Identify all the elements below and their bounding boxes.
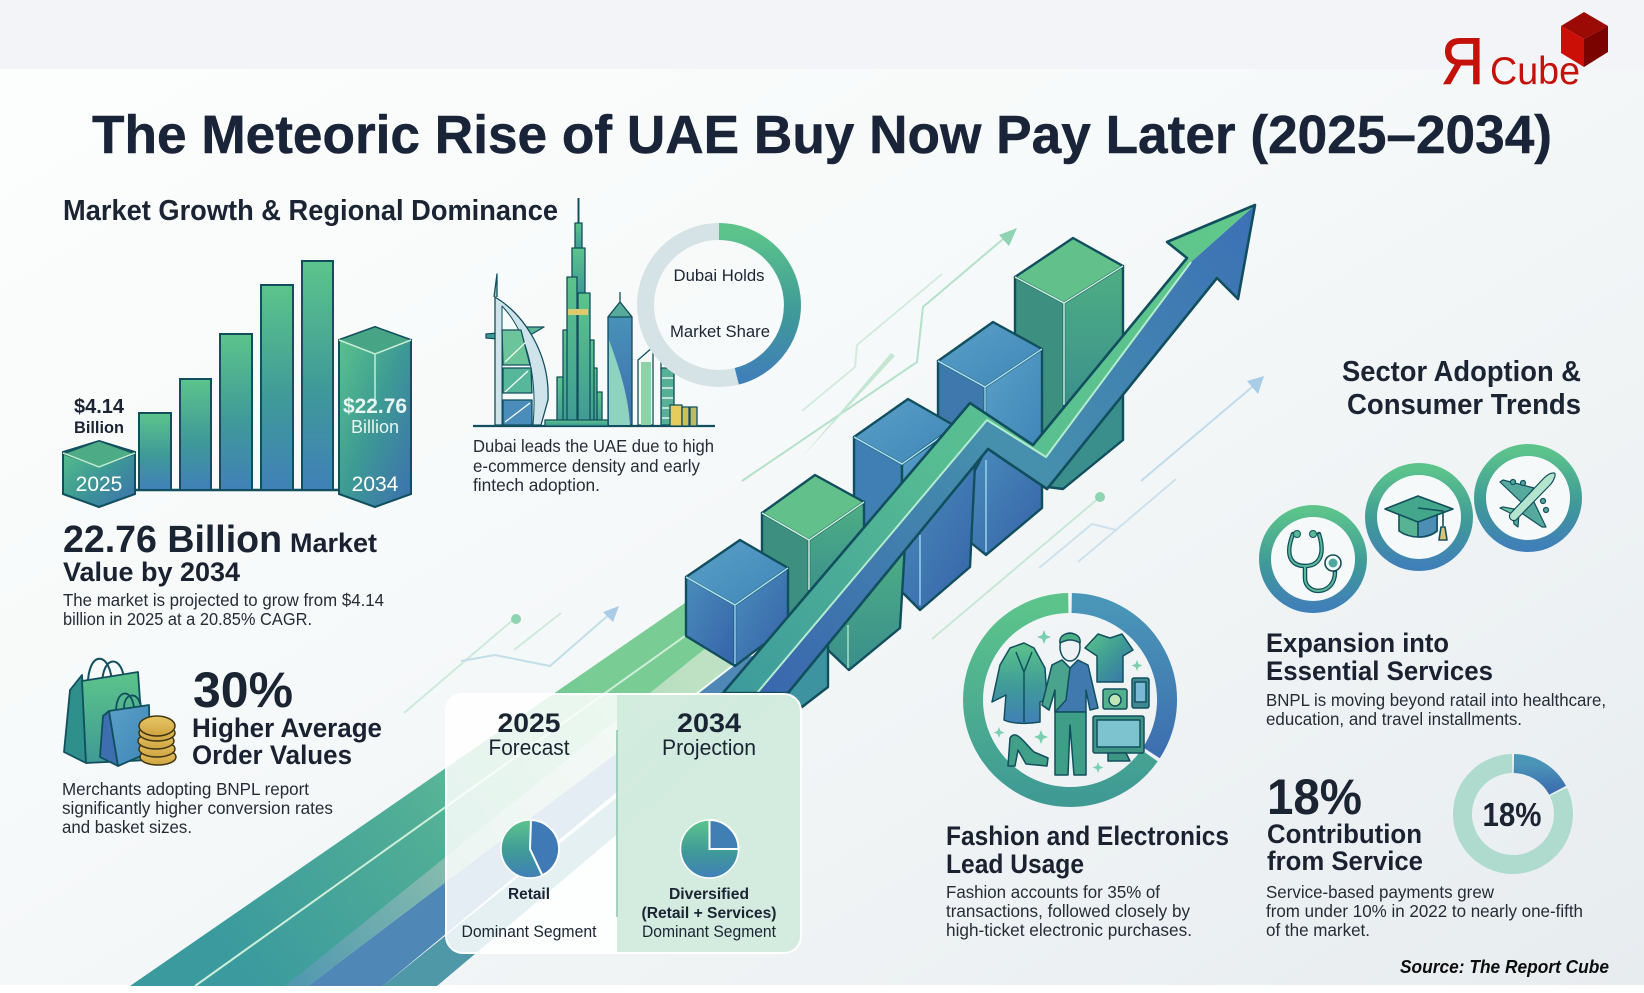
donut: 18% share [1462,764,1563,864]
column 4 blue [854,399,975,610]
2025 forecast column [462,708,597,941]
source note: Source: The Report Cube [1400,957,1609,977]
cube: 2034 [339,327,411,507]
stat: 30% higher AOV: Higher Average [192,713,382,743]
logo: RCube: Я [1441,24,1484,98]
stat: 18% contribution [1266,769,1583,940]
stat: 18% contribution: from Service [1267,846,1423,876]
stat: 22.76 Billion: 22.76 Billion [63,519,282,561]
2025 forecast column: Forecast [488,735,570,760]
2034 projection column: 2034 [677,708,741,738]
stat: 30% higher AOV: significantly higher conversion rates [62,798,333,818]
stat: 22.76 Billion: Market [290,528,377,558]
heading: Market Growth: Market Growth & Regional Dominance [63,195,558,227]
text: Dubai description: fintech adoption. [473,475,600,495]
2034 projection column: Projection [662,735,756,760]
stat: 18% contribution: 18% [1267,769,1362,825]
text: Dubai description [473,436,714,495]
label: $4.14 Billion [74,396,125,437]
text: Fashion and Electronics [946,821,1229,940]
text: Fashion and Electronics: Fashion and Electronics [946,821,1229,851]
stat: 18% contribution: Contribution [1267,819,1422,849]
donut: fashion and electronics [973,603,1167,797]
text: Expansion into Essential Services: Essential Services [1266,656,1493,686]
icon: clothing and electronics [992,630,1149,775]
text: Expansion into Essential Services: BNPL is moving beyond ratail into healthcare, [1266,690,1606,710]
label: $4.14 Billion: $4.14 [74,396,125,418]
icon: shopping bags and coins [64,659,176,766]
illustration: Dubai skyline [473,198,715,426]
stat: 22.76 Billion: Value by 2034 [63,557,240,587]
arrow: main growth arrow [723,205,1255,693]
stat: 30% higher AOV: Order Values [192,740,352,770]
donut: Dubai market share: Dubai Holds [674,266,764,285]
stat: 18% contribution: Service-based payments grew [1266,882,1494,902]
chart: isometric growth columns [686,238,1123,707]
stat: 22.76 Billion: The market is projected to grow from $4.14 [63,590,384,610]
2025 forecast column: Dominant Segment [462,922,597,941]
stat: 18% contribution: of the market. [1266,920,1370,940]
cube: 2034: $22.76 [343,395,407,418]
text: Dubai description: e-commerce density and early [473,456,700,476]
donut: Dubai market share [646,232,792,378]
heading: Sector Adoption: Sector Adoption & [1342,356,1581,388]
logo: RCube: Cube [1490,50,1580,93]
cube: 2025 [63,441,135,507]
text: Expansion into Essential Services: education, and travel installments. [1266,709,1522,729]
title: The Meteoric Rise of UAE Buy Now Pay Later (2025–2034) [92,105,1552,165]
heading: Sector Adoption [1342,356,1581,421]
text: Fashion and Electronics: high-ticket electronic purchases. [946,920,1192,940]
stat: 22.76 Billion [63,519,384,629]
2034 projection column: Diversified [669,886,749,903]
cube: 2025: 2025 [76,473,122,496]
towers [608,292,697,426]
text: Dubai description: Dubai leads the UAE due to high [473,436,714,456]
2034 projection column [642,708,776,941]
stat: 22.76 Billion: billion in 2025 at a 20.85% CAGR. [63,609,312,629]
icon: graduation cap [1371,469,1467,565]
panel: forecast comparison card [446,694,801,953]
Burj Al Arab [486,274,548,425]
donut: Dubai market share: Market Share [670,322,770,341]
Burj Khalifa [545,198,613,426]
stat: 30% higher AOV: Merchants adopting BNPL report [62,779,309,799]
cube 1 blue [686,540,788,666]
stat: 30% higher AOV: 30% [193,662,293,718]
text: Fashion and Electronics: Fashion accounts for 35% of [946,882,1160,902]
donut: 18% share: 18% [1482,796,1542,833]
column 6 green [1015,238,1123,489]
column 3 green [762,475,905,670]
text: Fashion and Electronics: transactions, followed closely by [946,901,1190,921]
2034 projection column: (Retail + Services) [642,905,776,922]
cube: 2034: 2034 [352,473,399,496]
2034 projection column: Dominant Segment [642,922,776,941]
logo: RCube [1441,12,1608,98]
faded trend trails [404,228,1264,713]
label: $4.14 Billion: Billion [74,418,124,437]
bar chart: market growth [63,261,411,507]
background swoosh [130,565,800,986]
text: Expansion into Essential Services: Expansion into [1266,628,1449,658]
2025 forecast column: 2025 [498,708,560,738]
stat: 30% higher AOV: and basket sizes. [62,817,192,837]
column base fragment [780,640,828,707]
icon: airplane [1480,450,1576,546]
cube: 2034: Billion [351,417,399,437]
text: Fashion and Electronics: Lead Usage [946,849,1084,879]
heading: Sector Adoption: Consumer Trends [1347,389,1581,421]
2025 forecast column: Retail [508,886,550,903]
text: Expansion into Essential Services [1266,628,1606,729]
stat: 30% higher AOV [62,662,382,837]
column 5 blue [938,322,1042,555]
stat: 18% contribution: from under 10% in 2022 to nearly one-fifth [1266,901,1583,921]
icon: stethoscope [1265,511,1361,607]
